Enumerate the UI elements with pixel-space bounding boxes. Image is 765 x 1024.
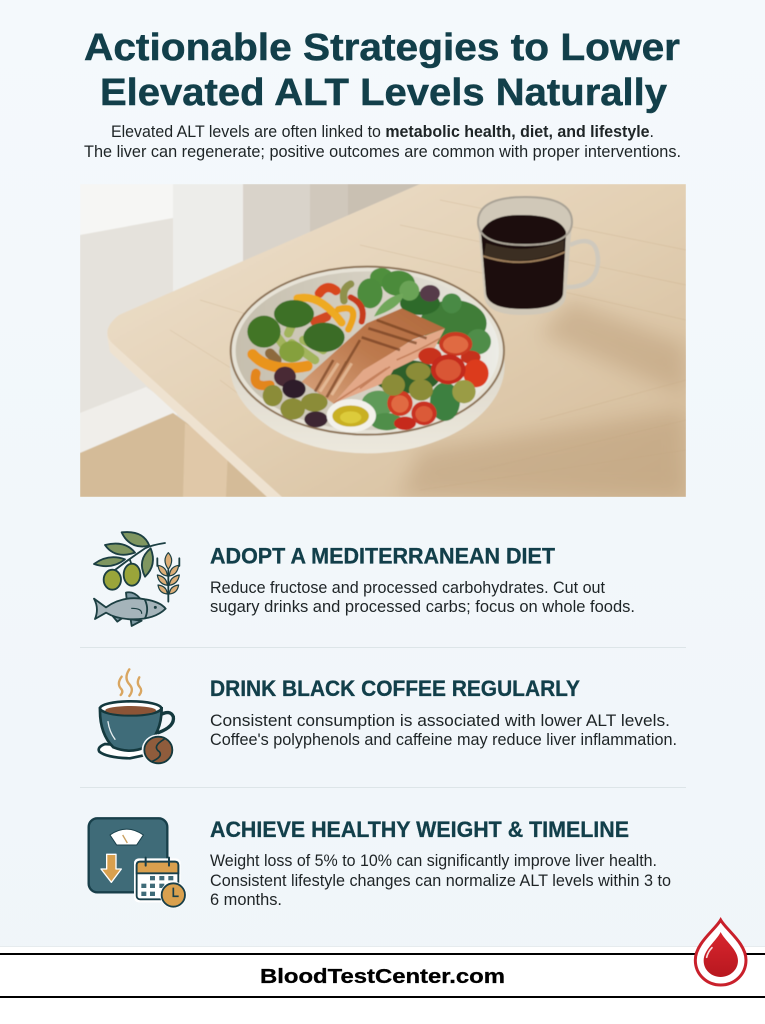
description: Weight loss of 5% to 10% can significantly improve liver health.	[210, 852, 657, 870]
icon: olive branch, wheat and fish	[94, 532, 179, 626]
olives	[263, 363, 476, 427]
icon: glass coffee mug	[478, 197, 598, 315]
description: sugary drinks and processed carbs; focus on whole foods.	[210, 598, 635, 616]
salmon fillet	[302, 308, 445, 403]
title: Elevated ALT Levels Naturally	[100, 72, 667, 114]
intro text	[84, 123, 681, 161]
footer site name: BloodTestCenter.com	[260, 966, 505, 988]
icon: blood drop logo	[695, 920, 746, 985]
strategy 3: healthy weight and timeline	[89, 817, 671, 909]
description	[210, 579, 635, 616]
table shadows	[400, 300, 686, 497]
heading: ADOPT A MEDITERRANEAN DIET	[210, 544, 556, 568]
intro text: Elevated ALT levels are often linked to metabolic health, diet, and lifestyle.	[111, 123, 654, 141]
description: Consistent consumption is associated with lower ALT levels.	[210, 712, 670, 730]
description: Coffee's polyphenols and caffeine may reduce liver inflammation.	[210, 731, 677, 749]
table edge	[108, 339, 282, 497]
salad bowl with food	[230, 267, 505, 453]
table top	[107, 184, 686, 497]
icon: weighing scale, calendar and clock	[89, 818, 186, 908]
table leg	[183, 423, 228, 497]
strategy 2: black coffee	[99, 669, 677, 766]
olive oil dish	[327, 399, 376, 432]
heading: DRINK BLACK COFFEE REGULARLY	[210, 676, 580, 701]
icon: coffee cup with steam and bean	[99, 669, 175, 766]
description: 6 months.	[210, 891, 282, 909]
description	[210, 852, 671, 909]
title: Actionable Strategies to Lower	[84, 27, 680, 69]
wood grain	[174, 200, 599, 384]
wall and curtains	[80, 184, 420, 497]
footer band	[0, 946, 765, 1024]
heading: ACHIEVE HEALTHY WEIGHT & TIMELINE	[210, 817, 629, 842]
panel: hero photo of salmon bowl and coffee on a table	[80, 184, 686, 497]
intro text: The liver can regenerate; positive outcomes are common with proper interventions.	[84, 143, 681, 161]
description: Reduce fructose and processed carbohydrates. Cut out	[210, 579, 605, 597]
title	[84, 27, 680, 114]
leafy greens	[357, 268, 491, 430]
bell peppers	[253, 284, 363, 386]
description: Consistent lifestyle changes can normalize ALT levels within 3 to	[210, 872, 671, 890]
broccoli	[247, 300, 345, 362]
cherry tomatoes	[387, 332, 489, 430]
description	[210, 712, 677, 749]
bowl	[230, 267, 505, 453]
strategy 1: Mediterranean diet	[94, 532, 635, 626]
